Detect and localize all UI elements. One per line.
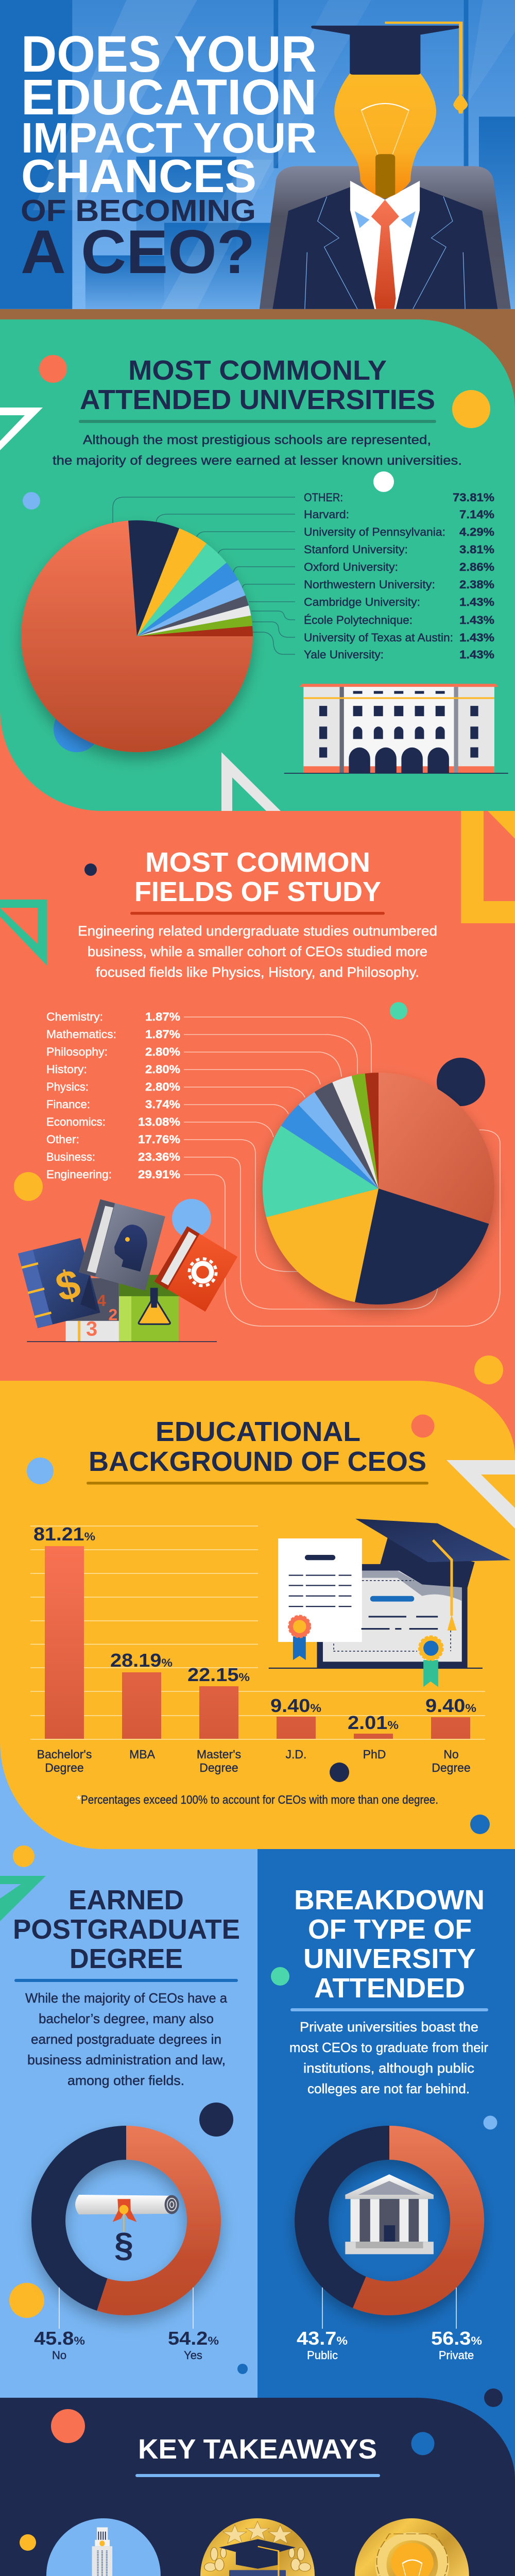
legend: universities: 2.86%	[459, 561, 494, 573]
legend: universities: Northwestern University:	[304, 578, 435, 591]
heading: most common fields of study: FIELDS OF STUDY	[134, 876, 381, 907]
legend: universities: Yale University:	[304, 648, 384, 661]
legend: fields of study: 1.87%	[145, 1028, 180, 1041]
legend: fields of study: 2.80%	[145, 1045, 180, 1058]
legend: fields of study: Engineering:	[46, 1168, 112, 1181]
legend: universities: 1.43%	[459, 631, 494, 644]
tassel	[385, 23, 461, 95]
legend: fields of study: 17.76%	[138, 1133, 180, 1146]
main title: IMPACT YOUR	[21, 114, 317, 162]
pie chart: fields of study	[263, 1073, 494, 1304]
donut labels: type of university: Public	[307, 2349, 338, 2362]
main title	[21, 25, 317, 286]
text: type of university: colleges are not far behind.	[307, 2081, 470, 2096]
legend: universities: 1.43%	[459, 596, 494, 608]
donut labels: earned postgraduate degree: Yes	[184, 2349, 202, 2362]
legend: fields of study: 2.80%	[145, 1080, 180, 1093]
heading: breakdown of type of university attended	[290, 1885, 488, 2011]
heading: breakdown of type of university attended: UNIVERSITY	[303, 1943, 476, 1974]
bar values: 28.19 %	[110, 1650, 173, 1671]
main title: EDUCATION	[21, 69, 317, 125]
decorative dots: postgraduate panel	[9, 2103, 248, 2374]
text: earned postgraduate degree	[25, 1990, 228, 2088]
bar labels	[37, 1748, 471, 1774]
legend: universities: 1.43%	[459, 648, 494, 661]
icon: University of Texas tower	[46, 2518, 161, 2576]
decorative shapes: universities panel	[0, 355, 490, 811]
heading: breakdown of type of university attended: BREAKDOWN	[294, 1885, 485, 1916]
hero illustration: office background and CEO with light bulb head	[0, 0, 515, 309]
donut labels: type of university: Private	[439, 2349, 474, 2362]
heading: breakdown of type of university attended: ATTENDED	[314, 1973, 465, 2004]
heading: most commonly attended universities	[79, 355, 436, 423]
icon: diplomas and graduation cap	[269, 1519, 511, 1687]
legend: fields of study: Philosophy:	[46, 1045, 108, 1058]
intro text: universities: Although the most prestigious schools are represented,	[83, 433, 431, 447]
bar values: 9.40 %	[270, 1695, 321, 1716]
heading: earned postgraduate degree: EARNED	[68, 1885, 184, 1916]
heading: earned postgraduate degree: POSTGRADUATE	[13, 1914, 240, 1945]
bar labels: Degree	[45, 1761, 84, 1774]
donut labels: type of university: 43.7 %	[297, 2328, 348, 2349]
legend: universities: 7.14%	[459, 508, 494, 521]
footnote: percentages: *Percentages exceed 100% to account for CEOs with more than one degree.	[77, 1793, 438, 1806]
icon: stack of books	[18, 1199, 237, 1342]
text: earned postgraduate degree: business administration and law,	[27, 2052, 226, 2067]
icon: stack of books: 2	[108, 1306, 117, 1324]
decorative shapes: fields of study panel	[0, 811, 515, 1384]
bar values	[33, 1523, 476, 1733]
donut labels: earned postgraduate degree: 54.2 %	[168, 2328, 219, 2349]
legend: universities: University of Texas at Austin:	[304, 631, 453, 644]
legend: universities: Stanford University:	[304, 543, 408, 556]
graduation cap	[311, 26, 459, 75]
main title: DOES YOUR	[21, 25, 317, 82]
shirt	[350, 181, 420, 309]
legend: fields of study: Mathematics:	[46, 1028, 116, 1041]
legend: fields of study: Finance:	[46, 1098, 90, 1111]
bar chart: educational background	[30, 1523, 485, 1774]
donut labels: earned postgraduate degree	[34, 2287, 219, 2362]
main title: A CEO?	[21, 217, 255, 286]
bars	[45, 1546, 470, 1739]
legend: fields of study	[46, 1010, 180, 1181]
bar labels: No	[443, 1748, 459, 1761]
legend: universities: École Polytechnique:	[304, 614, 413, 626]
legend: fields of study: 3.74%	[145, 1098, 180, 1111]
intro text: fields of study: business, while a smaller cohort of CEOs studied more	[88, 944, 427, 959]
decorative shapes: educational background panel	[0, 1415, 515, 1921]
legend: universities	[304, 491, 494, 661]
icon: diploma scroll with section sign: §	[114, 2226, 133, 2264]
legend: universities: OTHER:	[304, 491, 343, 504]
bar values: 22.15 %	[187, 1664, 250, 1685]
legend: fields of study: 29.91%	[138, 1168, 180, 1181]
icon: stack of books: 4	[97, 1291, 106, 1310]
pie chart: universities	[21, 520, 253, 752]
text: type of university	[289, 2019, 488, 2096]
icon: stack of books: $	[51, 1260, 85, 1310]
icon: diploma scroll with section sign	[75, 2195, 179, 2264]
intro text: fields of study: focused fields like Physics, History, and Philosophy.	[96, 964, 419, 980]
legend: fields of study: Economics:	[46, 1115, 106, 1128]
legend: universities: Cambridge University:	[304, 596, 420, 608]
donut chart: earned postgraduate degree	[31, 2126, 221, 2315]
main title: CHANCES	[21, 150, 256, 202]
heading: key takeaways	[135, 2434, 380, 2477]
leader lines: universities pie	[113, 497, 295, 654]
legend: universities: Harvard:	[304, 508, 349, 521]
heading: most commonly attended universities: ATTENDED UNIVERSITIES	[80, 384, 435, 415]
icon: gold medal with cap and briefcase	[200, 2518, 315, 2576]
tie	[371, 200, 399, 309]
donut labels: earned postgraduate degree: No	[52, 2349, 66, 2362]
legend: fields of study: 13.08%	[138, 1115, 180, 1128]
text: earned postgraduate degree: among other fields.	[67, 2073, 184, 2088]
text: earned postgraduate degree: earned postgraduate degrees in	[31, 2031, 221, 2047]
bar values: 81.21 %	[33, 1523, 95, 1545]
legend: fields of study: 23.36%	[138, 1150, 180, 1163]
suit	[272, 187, 497, 309]
legend: fields of study: History:	[46, 1063, 87, 1076]
donut chart: type of university	[295, 2126, 484, 2315]
legend: universities: 4.29%	[459, 526, 494, 538]
legend: fields of study: Other:	[46, 1133, 79, 1146]
bar values: 2.01 %	[348, 1712, 399, 1733]
legend: fields of study: 1.87%	[145, 1010, 180, 1023]
legend: fields of study: Business:	[46, 1150, 95, 1163]
legend: fields of study: Chemistry:	[46, 1010, 103, 1023]
text: earned postgraduate degree: bachelor’s degree, many also	[39, 2011, 214, 2026]
intro text: fields of study	[78, 923, 437, 980]
heading: most common fields of study: MOST COMMON	[145, 847, 370, 878]
donut labels: type of university	[297, 2287, 482, 2362]
icon: gold medal with gear and light bulb	[355, 2518, 469, 2576]
legend: universities: 3.81%	[459, 543, 494, 556]
heading: educational background of CEOs: EDUCATIONAL	[156, 1416, 360, 1447]
bar labels: Degree	[432, 1761, 471, 1774]
decorative dots: university type panel	[271, 1967, 497, 2130]
heading: earned postgraduate degree	[13, 1885, 240, 1982]
icon: university bank building	[345, 2174, 434, 2254]
donut labels: earned postgraduate degree: 45.8 %	[34, 2328, 85, 2349]
heading: key takeaways: KEY TAKEAWAYS	[138, 2434, 377, 2465]
heading: earned postgraduate degree: DEGREE	[70, 1943, 183, 1974]
legend: universities: 1.43%	[459, 614, 494, 626]
main title: OF BECOMING	[21, 194, 256, 228]
heading: breakdown of type of university attended: OF TYPE OF	[308, 1914, 472, 1945]
bar labels: MBA	[129, 1748, 156, 1761]
legend: universities: Oxford University:	[304, 561, 398, 573]
heading: educational background of CEOs: BACKGROUND OF CEOS	[89, 1446, 426, 1477]
intro text: fields of study: Engineering related undergraduate studies outnumbered	[78, 923, 437, 939]
legend: fields of study: 2.80%	[145, 1063, 180, 1076]
text: earned postgraduate degree: While the majority of CEOs have a	[25, 1990, 228, 2006]
chair	[260, 166, 511, 309]
text: type of university: Private universities boast the	[300, 2019, 478, 2035]
donut labels: type of university: 56.3 %	[431, 2328, 482, 2349]
icon: university building	[284, 684, 508, 774]
intro text: universities	[53, 433, 462, 468]
decorative shapes: key takeaways panel	[20, 2388, 515, 2576]
text: type of university: institutions, although public	[303, 2060, 474, 2076]
legend: universities: 2.38%	[459, 578, 494, 591]
icon: stack of books: 3	[86, 1317, 97, 1340]
legend: universities: 73.81%	[453, 491, 494, 504]
legend: universities: University of Pennsylvania:	[304, 526, 445, 538]
heading: educational background of CEOs	[87, 1416, 428, 1485]
bar labels: J.D.	[286, 1748, 306, 1761]
bar labels: PhD	[363, 1748, 386, 1761]
text: type of university: most CEOs to graduate from their	[289, 2040, 488, 2055]
bar labels: Master's	[197, 1748, 241, 1761]
bulb head	[334, 74, 436, 199]
heading: most common fields of study	[130, 847, 385, 915]
heading: most commonly attended universities: MOST COMMONLY	[128, 355, 387, 386]
bar labels: Bachelor's	[37, 1748, 92, 1761]
bar labels: Degree	[199, 1761, 238, 1774]
legend: fields of study: Physics:	[46, 1080, 89, 1093]
bar values: 9.40 %	[425, 1695, 476, 1716]
leader lines: fields of study pie	[184, 1017, 500, 1326]
intro text: universities: the majority of degrees were earned at lesser known universities.	[53, 453, 462, 468]
